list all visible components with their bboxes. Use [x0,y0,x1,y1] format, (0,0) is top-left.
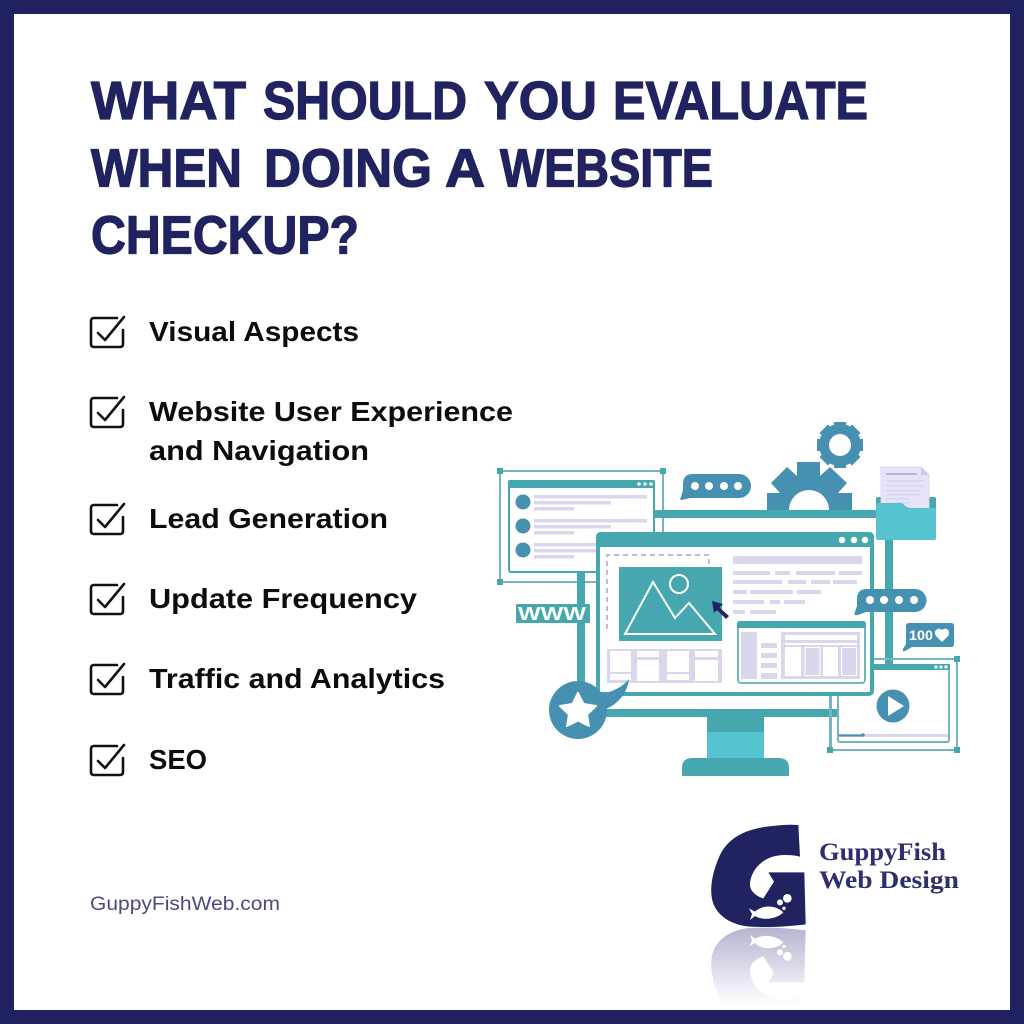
title: YOU [484,71,597,131]
large gear [767,462,852,510]
video window [827,656,960,753]
like counter bubble [903,623,954,651]
logo wordmark: GuppyFish [819,839,946,866]
small gear [817,422,863,468]
checklist [91,316,513,775]
www label [516,604,590,624]
item: Update Frequency: Update Frequency [149,583,418,614]
monitor illustration [497,422,960,776]
item: SEO [91,744,207,775]
item: Lead Generation: Lead Generation [149,503,388,534]
item: Visual Aspects: Visual Aspects [149,316,359,347]
dashed image placeholder [607,555,709,629]
thumbnail grid [607,649,722,683]
logo [711,824,959,996]
title: EVALUATE [613,71,868,131]
title: WEBSITE [500,138,713,198]
title: CHECKUP? [91,206,359,266]
title: DOING [264,138,432,198]
back window with list [497,468,666,585]
like counter bubble: 100 [909,628,933,643]
www label: WWW [518,604,586,624]
image block [619,567,722,641]
item: Website User Experience and Navigation: and Navigation [149,435,369,466]
star badge [549,679,629,739]
item: SEO: SEO [149,744,207,775]
speech bubble right [854,589,926,615]
text lines [733,556,862,614]
item: Traffic and Analytics: Traffic and Analytics [149,663,445,694]
title [91,71,868,266]
item: Website User Experience and Navigation: Website User Experience [149,396,513,427]
monitor frame bars [577,510,893,717]
folder with document [876,467,936,540]
small layout window [737,621,866,683]
logo mark G [711,825,806,927]
logo wordmark: Web Design [819,867,959,894]
title: WHAT [91,71,246,131]
monitor stand [682,717,789,776]
item: Website User Experience and Navigation [91,396,513,466]
main browser window [596,532,874,694]
website url: GuppyFishWeb.com [90,894,280,915]
title: SHOULD [263,71,467,131]
title: WHEN [91,138,242,198]
speech bubble left [680,474,751,500]
cursor [712,601,729,619]
title: A [445,138,485,198]
logo reflection [711,928,806,996]
logo wordmark [819,839,959,894]
